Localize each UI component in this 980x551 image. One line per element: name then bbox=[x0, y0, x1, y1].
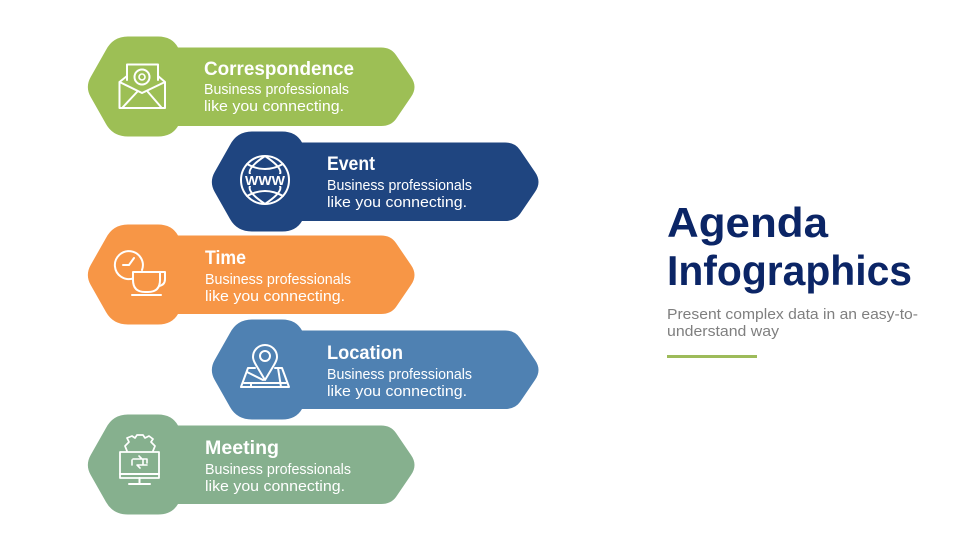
text: correspondence description: like you connecting. bbox=[204, 98, 344, 115]
icon: map pin bbox=[241, 345, 289, 387]
panel: location bbox=[212, 320, 538, 420]
text: time description: like you connecting. bbox=[205, 288, 345, 305]
text: time description: Business professionals bbox=[205, 271, 351, 288]
icon: monitor with gear bbox=[120, 435, 159, 484]
icon: clock and cup bbox=[115, 251, 165, 295]
panel: correspondence bbox=[88, 36, 414, 136]
icon: envelope with at sign bbox=[120, 64, 165, 108]
panel shape: event bbox=[212, 132, 538, 232]
heading: correspondence: Correspondence bbox=[204, 59, 354, 80]
text: meeting description: like you connecting. bbox=[205, 478, 345, 495]
panel: event bbox=[212, 132, 538, 232]
subtitle text: Present complex data in an easy-to- bbox=[667, 306, 918, 323]
icon: www globe bbox=[241, 156, 289, 204]
heading: meeting: Meeting bbox=[205, 438, 279, 459]
panel shape: location bbox=[212, 320, 538, 420]
heading: time: Time bbox=[205, 248, 246, 269]
heading: event: Event bbox=[327, 154, 376, 175]
subtitle text: understand way bbox=[667, 323, 780, 340]
panel shape: time bbox=[88, 224, 414, 324]
text: correspondence description: Business professionals bbox=[204, 81, 349, 98]
panel: time bbox=[88, 224, 414, 324]
text: event description: like you connecting. bbox=[327, 194, 467, 211]
text: location description: Business professionals bbox=[327, 366, 472, 383]
heading: location: Location bbox=[327, 343, 403, 364]
accent line bbox=[667, 355, 757, 358]
panel: meeting bbox=[88, 414, 414, 514]
text: location description: like you connecting. bbox=[327, 383, 467, 400]
panel shape: meeting bbox=[88, 414, 414, 514]
panel shape: correspondence bbox=[88, 36, 414, 136]
icon: www globe: WWW bbox=[245, 174, 285, 188]
title: Infographics bbox=[667, 247, 912, 294]
text: event description: Business professionals bbox=[327, 177, 472, 194]
title: Agenda bbox=[667, 199, 829, 246]
text: meeting description: Business professionals bbox=[205, 461, 351, 478]
